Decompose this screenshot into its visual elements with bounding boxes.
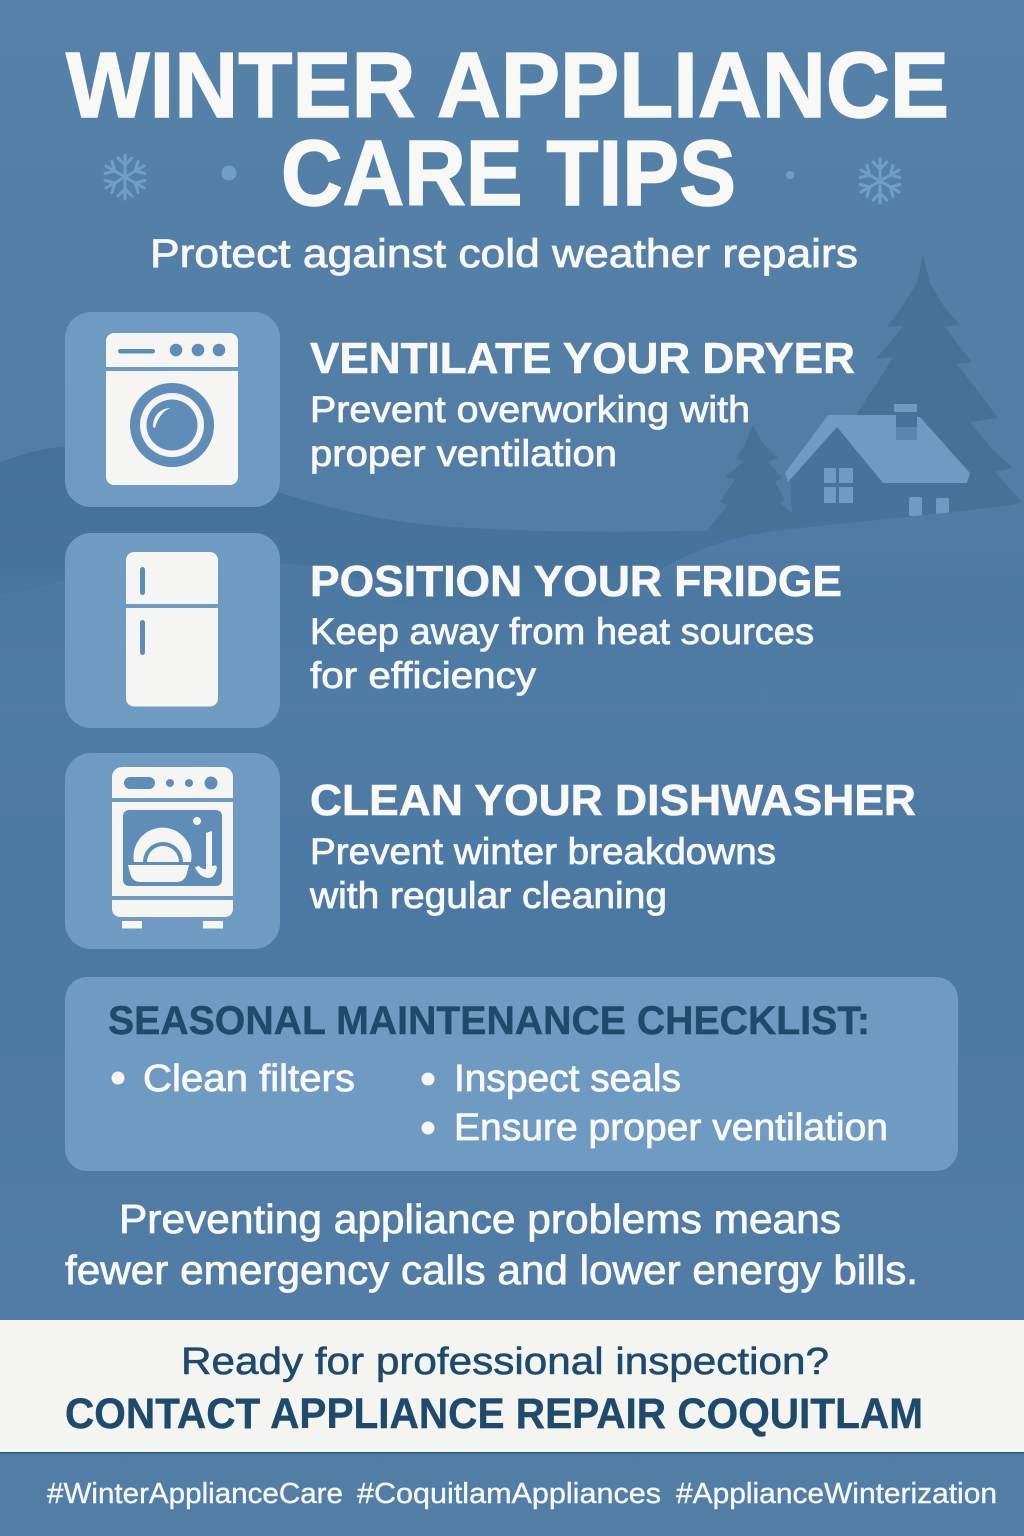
description: Keep away from heat sources (310, 611, 814, 652)
call to action band (0, 1320, 1024, 1454)
small pine tree (700, 425, 792, 540)
front hill right (500, 503, 1024, 660)
house chimney (894, 404, 917, 440)
house windows (824, 468, 949, 516)
title: WINTER APPLIANCE (66, 33, 949, 137)
icon: snowflake right (857, 159, 903, 203)
panel: dryer tip (65, 312, 855, 507)
house snowy roof (785, 415, 970, 483)
checklist heading: SEASONAL MAINTENANCE CHECKLIST: (108, 999, 870, 1043)
heading: POSITION YOUR FRIDGE (310, 557, 842, 606)
icon: snowflake left (102, 155, 148, 199)
description (310, 611, 814, 696)
call to action contact: CONTACT APPLIANCE REPAIR COQUITLAM (65, 1390, 923, 1438)
winter landscape scene (0, 255, 1024, 780)
call to action question: Ready for professional inspection? (181, 1341, 829, 1383)
closing statement: Preventing appliance problems means (119, 1196, 841, 1242)
checklist item: ensure proper ventilation: Ensure proper ventilation (454, 1107, 888, 1149)
panel: seasonal maintenance checklist (65, 977, 958, 1171)
back hill (0, 447, 1024, 780)
icon tile: dishwasher (65, 753, 280, 949)
title (66, 33, 949, 225)
heading: VENTILATE YOUR DRYER (310, 334, 855, 383)
hashtags (47, 1478, 997, 1510)
description (310, 389, 750, 474)
checklist item: clean filters: Clean filters (143, 1058, 355, 1100)
description: proper ventilation (310, 433, 617, 474)
description: for efficiency (310, 655, 537, 696)
checklist item: inspect seals: Inspect seals (454, 1058, 681, 1100)
big pine tree (857, 255, 1022, 530)
subtitle: Protect against cold weather repairs (150, 232, 858, 276)
description: Prevent winter breakdowns (310, 831, 776, 872)
house body (790, 427, 967, 535)
hashtags: #WinterApplianceCare (47, 1478, 343, 1510)
panel: fridge tip (65, 533, 842, 728)
title: CARE TIPS (281, 121, 736, 225)
decorative dot right (786, 171, 794, 179)
closing statement (65, 1196, 918, 1293)
front hill left (0, 563, 460, 680)
description (309, 831, 776, 916)
hashtags: #CoquitlamAppliances (357, 1478, 661, 1510)
hashtags: #ApplianceWinterization (676, 1478, 997, 1510)
description: with regular cleaning (309, 875, 667, 916)
heading: CLEAN YOUR DISHWASHER (310, 776, 916, 825)
icon tile: dryer (65, 312, 280, 507)
decorative dot left (222, 166, 236, 180)
closing statement: fewer emergency calls and lower energy bills. (65, 1247, 918, 1293)
description: Prevent overworking with (310, 389, 750, 430)
icon tile: fridge (65, 533, 280, 728)
panel: dishwasher tip (65, 753, 916, 949)
